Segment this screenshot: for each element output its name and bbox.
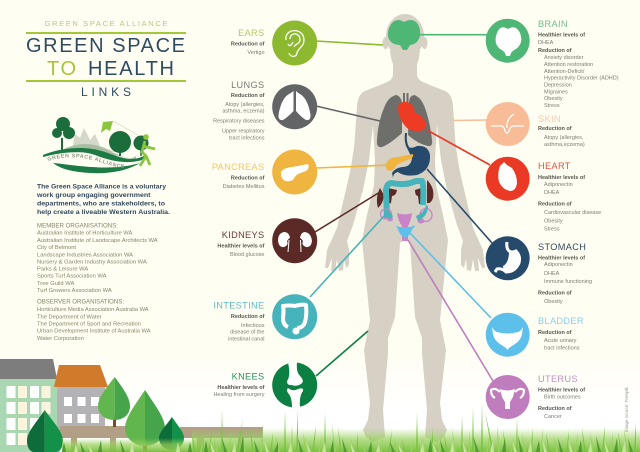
label: stomach: Reduction of <box>538 290 572 296</box>
member organisations list <box>37 222 158 294</box>
intro paragraph: departments, who are stakeholders, to <box>37 200 165 208</box>
member organisations list: Sports Turf Association WA <box>37 274 107 280</box>
label: heart: Cardiovascular disease <box>544 210 601 216</box>
icon: knees <box>272 362 317 408</box>
intro paragraph: work group engaging government <box>36 192 151 199</box>
scene: buildings, trees and benches <box>0 359 265 452</box>
label: heart: Reduction of <box>538 202 572 208</box>
organ: heart <box>398 102 426 131</box>
label: stomach: Obesity <box>544 299 563 305</box>
label: heart: Obesity <box>544 218 563 224</box>
label: lungs: tract infections <box>229 136 265 142</box>
label: knees: KNEES <box>232 371 264 381</box>
label: intestine: disease of the <box>230 330 264 336</box>
label: pancreas: Reduction of <box>231 176 265 182</box>
member organisations list: Parks & Leisure WA <box>37 267 88 273</box>
organ: uterus <box>380 208 432 241</box>
label: lungs <box>213 80 265 142</box>
label: pancreas <box>212 162 265 190</box>
label: stomach: STOMACH <box>538 242 586 252</box>
title block <box>26 19 186 99</box>
intro paragraph: help create a liveable Western Australia. <box>37 209 170 216</box>
icon: lungs <box>272 84 317 129</box>
label: kidneys: Healthier levels of <box>217 244 265 250</box>
label: skin <box>538 114 585 148</box>
label: uterus: Birth outcomes <box>544 394 581 400</box>
observer organisations list: OBSERVER ORGANISATIONS: <box>37 298 124 306</box>
label: bladder: tract infections <box>544 346 580 352</box>
observer organisations list: The Department of Sport and Recreation <box>37 322 141 328</box>
label: intestine: Reduction of <box>231 314 265 320</box>
member organisations list: City of Belmont <box>37 245 76 251</box>
title block: GREEN SPACE <box>26 35 185 57</box>
intro paragraph <box>36 184 170 216</box>
label: uterus <box>538 374 585 420</box>
label: heart: Stress <box>544 226 560 232</box>
label: lungs: Atopy (allergies, <box>225 102 265 108</box>
connector: brain <box>420 34 488 36</box>
observer organisations list: Urban Development Institute of Australia WA <box>37 329 151 335</box>
label: uterus: UTERUS <box>538 374 578 384</box>
icon: pancreas <box>272 150 317 194</box>
connector: bladder <box>410 233 491 318</box>
label: uterus: Reduction of <box>538 406 572 412</box>
label: brain: Migraines <box>544 90 568 96</box>
organ: brain <box>388 20 420 50</box>
label: stomach: Adiponectin <box>544 262 573 268</box>
icon: stomach <box>486 236 530 280</box>
observer organisations list: Water Corporation <box>37 336 84 342</box>
icon: brain <box>486 19 530 63</box>
icon: skin <box>486 102 530 146</box>
label: knees <box>213 371 265 398</box>
connector: intestine <box>310 215 385 297</box>
grass <box>62 402 640 452</box>
label: pancreas: PANCREAS <box>212 162 264 172</box>
member organisations list: Tree Guild WA <box>37 281 74 287</box>
label: heart: Adiponectin <box>544 182 573 188</box>
label: knees: Healing from surgery <box>213 392 265 398</box>
connector: kidneys <box>315 192 380 232</box>
member organisations list: Landscape Industries Association WA <box>37 252 133 258</box>
label: brain <box>538 19 619 109</box>
label: uterus: Healthier levels of <box>538 388 585 394</box>
label: kidneys: KIDNEYS <box>222 230 264 240</box>
connector: knees <box>316 331 368 376</box>
label: intestine: intestinal canal <box>228 336 264 342</box>
organ: stomach <box>392 133 430 178</box>
label: skin: Reduction of <box>538 126 572 132</box>
label: skin: Atopy (allergies, <box>544 135 584 141</box>
organ: pancreas <box>386 154 413 171</box>
label: lungs: Upper respiratory <box>222 128 265 134</box>
organ: lungs <box>377 93 432 147</box>
label: uterus: Cancer <box>544 414 562 420</box>
member organisations list: Nursery & Garden Industry Association WA <box>37 259 147 265</box>
label: brain: Attention-Deficit/ <box>544 69 585 75</box>
label: heart: Healthier levels of <box>538 175 585 181</box>
connector: skin <box>453 119 488 122</box>
organ: kidneys <box>377 180 433 208</box>
logo: Green Space Alliance: GREEN SPACE ALLIANCE <box>48 154 124 168</box>
observer organisations list: Horticulture Media Association Australia WA <box>37 307 149 313</box>
label: brain: Obesity <box>544 96 563 102</box>
label: heart <box>538 161 601 232</box>
connector: lungs <box>316 106 380 121</box>
label: bladder: Reduction of <box>538 330 572 336</box>
label: intestine <box>213 301 265 342</box>
label: skin: asthma,eczema) <box>544 142 585 148</box>
organ: bladder <box>396 226 415 238</box>
human body silhouette <box>325 14 485 442</box>
title block: HEALTH <box>88 58 174 80</box>
icon: kidneys <box>272 218 317 263</box>
label: brain: Stress <box>544 103 560 109</box>
label: stomach: DHEA <box>544 271 560 277</box>
intestine lower loop <box>384 205 428 221</box>
label: stomach <box>538 242 592 305</box>
title block: TO <box>47 58 76 80</box>
label: kidneys: Blood glucose <box>230 252 264 258</box>
member organisations list: Australian Institute of Horticulture WA <box>37 231 133 237</box>
label: lungs: asthma, eczema) <box>222 108 265 114</box>
observer organisations list: The Department of Water <box>37 314 102 320</box>
label: intestine: Infectious <box>241 323 265 329</box>
label: brain: BRAIN <box>538 19 568 29</box>
label: knees: Healthier levels of <box>217 385 265 391</box>
icon: heart <box>486 157 530 201</box>
connector: heart <box>427 130 490 165</box>
label: bladder <box>538 316 584 352</box>
label: brain: Reduction of <box>538 48 572 54</box>
label: lungs: LUNGS <box>231 80 264 90</box>
organ: intestine <box>386 181 423 218</box>
label: lungs: Reduction of <box>231 93 265 99</box>
icon: uterus <box>486 375 530 419</box>
label: brain: Anxiety disorder <box>544 55 584 61</box>
label: lungs: Respiratory diseases <box>213 118 265 124</box>
label: brain: Hyperactivity Disorder (ADHD) <box>544 76 619 82</box>
label: intestine: INTESTINE <box>213 301 264 311</box>
label: skin: SKIN <box>538 114 561 124</box>
label: bladder: Acute urinary <box>544 338 577 344</box>
intro paragraph: The Green Space Alliance is a voluntary <box>37 184 167 190</box>
title block: GREEN SPACE ALLIANCE <box>44 19 168 28</box>
connector: pancreas <box>316 165 390 168</box>
connector: uterus <box>408 240 493 381</box>
label: pancreas: Diabetes Mellitus <box>223 184 265 190</box>
label: heart: HEART <box>538 161 571 171</box>
member organisations list: MEMBER ORGANISATIONS: <box>37 222 118 230</box>
icon: intestine <box>272 294 317 339</box>
label: stomach: Healthier levels of <box>538 256 585 262</box>
label: stomach: Immune functioning <box>544 279 592 285</box>
icon: ears <box>272 20 317 66</box>
label: brain: Depression <box>544 82 572 88</box>
label: heart: DHEA <box>544 190 560 196</box>
logo: Green Space Alliance <box>43 117 156 174</box>
label: brain: Healthier levels of <box>538 32 585 38</box>
label: bladder: BLADDER <box>538 316 584 326</box>
icon: bladder <box>486 313 530 357</box>
label: ears <box>231 28 265 56</box>
connector: stomach <box>427 169 492 243</box>
label: ears: Reduction of <box>231 42 265 48</box>
member organisations list: Turf Growers Association WA <box>37 288 112 294</box>
label: kidneys <box>217 230 265 258</box>
label: brain: Attention restoration <box>544 62 593 68</box>
connector: ears <box>316 41 383 45</box>
observer organisations list <box>37 298 151 342</box>
image source credit: Image source: Freepik <box>624 386 629 432</box>
member organisations list: Australian Institute of Landscape Architects WA <box>37 238 158 244</box>
label: ears: Vertigo <box>247 50 264 56</box>
title block: LINKS <box>81 85 131 99</box>
label: brain: DHEA <box>538 40 554 46</box>
label: ears: EARS <box>238 28 264 38</box>
